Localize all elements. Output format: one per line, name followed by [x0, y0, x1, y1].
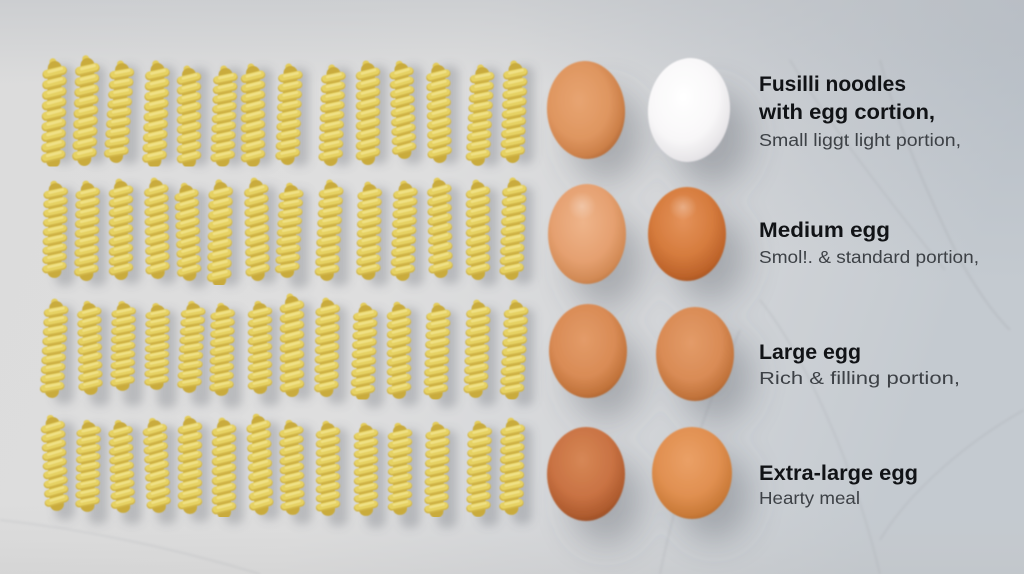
label: medium egg: Medium egg: [759, 219, 890, 242]
label: extra-large egg: [759, 462, 918, 508]
label: fusilli heading: Fusilli noodles: [759, 73, 906, 96]
pasta row 1: fusilli: [45, 59, 524, 161]
label: fusilli heading: [758, 73, 961, 150]
label: large egg: [759, 341, 960, 388]
label: extra-large egg: Extra-large egg: [759, 462, 918, 485]
label: extra-large egg: Hearty meal: [759, 488, 860, 508]
label: large egg: Rich & filling portion,: [759, 368, 960, 388]
eggs row 2: medium: [548, 184, 726, 284]
label: fusilli heading: Small liggt light portion,: [759, 130, 961, 150]
eggs row 4: extra-large: [547, 427, 732, 521]
pasta row 4: fusilli: [44, 417, 521, 512]
pasta row 2: fusilli: [46, 181, 523, 280]
label: large egg: Large egg: [759, 341, 861, 364]
label: medium egg: [759, 219, 979, 267]
eggs row 3: large: [549, 304, 734, 401]
pasta row 3: fusilli: [44, 297, 525, 395]
eggs row 1: brown and white: [544, 55, 734, 165]
label: medium egg: Smol!. & standard portion,: [759, 247, 979, 267]
label: fusilli heading: with egg cortion,: [758, 101, 935, 124]
egg shadows: [570, 90, 752, 544]
pasta shadows: [54, 66, 534, 528]
